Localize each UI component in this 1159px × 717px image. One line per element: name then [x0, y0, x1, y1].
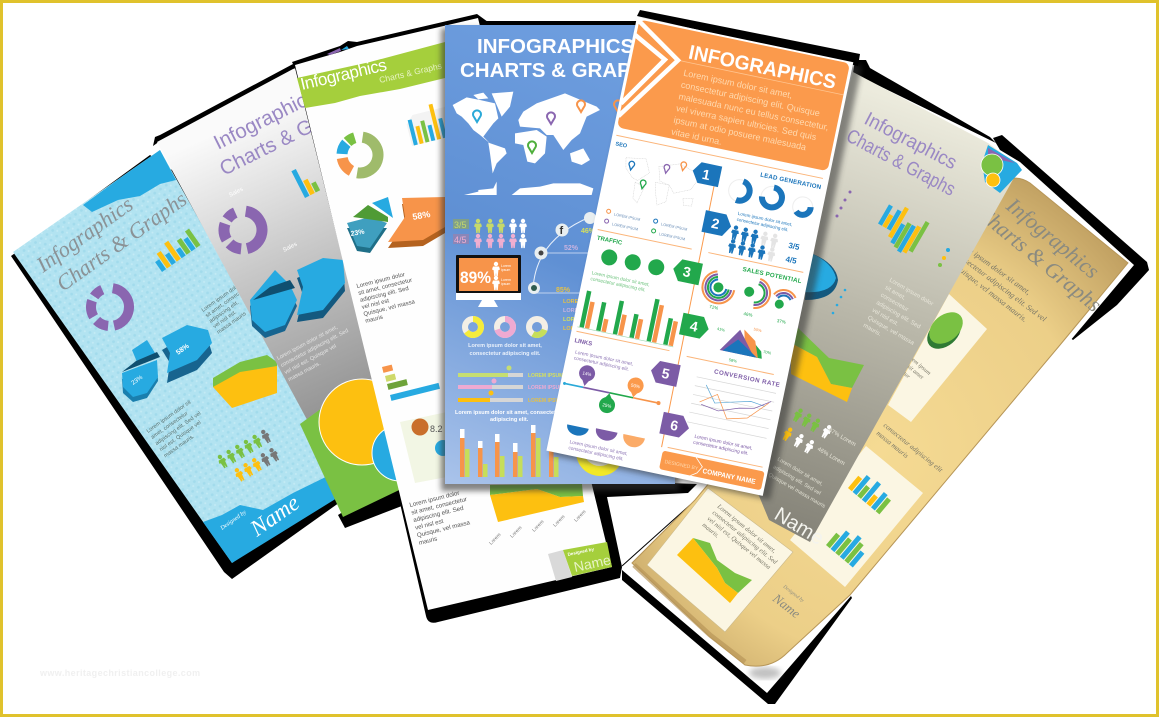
- footer text: [219, 490, 304, 542]
- 3D pie chart: 58%: [175, 342, 191, 357]
- middle text: massa mauris: [875, 429, 910, 460]
- poster 2: grey gradient: [157, 50, 420, 490]
- note text: Lorem ipsum dolor sit amet,: [715, 502, 777, 555]
- title: Infographics: [31, 191, 137, 278]
- lower text block: sit amet, consectetur: [411, 496, 468, 517]
- ratio labels: 3/5: [454, 220, 467, 230]
- people pictogram: [215, 428, 283, 487]
- text block: vel nisl est.: [871, 308, 900, 328]
- timeline pins: 14%: [582, 370, 592, 377]
- footer tab: Designed by: [567, 546, 595, 557]
- top note text: adipiscing: [877, 361, 900, 381]
- legend dots lower: [938, 248, 950, 267]
- traffic heading: TRAFFIC: [596, 236, 623, 247]
- text block upper: massa mauris: [216, 311, 248, 336]
- poster 6: beige-grey gradient: [740, 72, 1022, 550]
- badge 1: 1: [701, 166, 712, 183]
- links caption: consectetur adipiscing elit.: [573, 355, 630, 373]
- lower text block: [409, 488, 475, 547]
- middle text: consectetur adipiscing elit: [882, 421, 945, 475]
- 3D pie chart: [122, 325, 212, 402]
- area chart: [213, 355, 277, 408]
- map legend: LOREM IPSUM: [612, 222, 639, 232]
- poster 4: blue: [445, 25, 675, 484]
- text block upper: vel nisl est.: [212, 309, 238, 330]
- radial arc chart: [699, 265, 805, 324]
- yellow circle: [319, 379, 405, 465]
- footer tab: Name: [572, 551, 612, 575]
- soft shadow of orange poster: [550, 20, 862, 500]
- sales labels: Sales: [228, 187, 244, 199]
- ratio labels: 4/5: [454, 235, 467, 245]
- top note text: consectetur: [886, 358, 911, 381]
- green pie: [921, 306, 969, 355]
- text block: mauris: [365, 315, 384, 325]
- conversion caption: consectetur adipiscing elit.: [693, 440, 749, 457]
- badge 2: 2: [710, 215, 721, 232]
- title: INFOGRAPHICS: [477, 35, 634, 58]
- legend lines: LOREM: [563, 299, 583, 305]
- 3D bar chart: [149, 227, 201, 272]
- traffic caption: Lorem ipsum dolor sit amet,: [591, 270, 650, 288]
- area chart axis labels: Lorem: [509, 525, 523, 539]
- caption: [468, 343, 542, 357]
- timeline pins: 50%: [631, 383, 640, 389]
- badge 5: [649, 360, 681, 387]
- traffic panel: [577, 229, 694, 347]
- intro text: ipsum at odio posuere malesuada: [673, 115, 807, 152]
- links footer caption: [568, 439, 628, 463]
- title: Charts & Graphs: [216, 92, 363, 180]
- small bar chart: [291, 164, 320, 198]
- arc with icons: [528, 212, 600, 294]
- links timeline: [563, 381, 661, 405]
- text block: Quisque, vel massa: [866, 315, 915, 347]
- lower text block: adipiscing elit. Sed: [413, 505, 465, 524]
- intro text: Lorem ipsum dolor sit amet,: [683, 68, 793, 100]
- badge 6: 6: [669, 417, 680, 434]
- people labels: [816, 428, 857, 467]
- designer name: Name: [770, 503, 827, 550]
- text block: massa mauris.: [163, 434, 196, 459]
- footer text: Lorem dolor sit amet,: [776, 457, 824, 488]
- title: [843, 108, 961, 201]
- lead ratios: [785, 241, 801, 266]
- world map: [453, 92, 600, 195]
- text block: [356, 271, 420, 325]
- links footer caption: consectetur adipiscing elit.: [568, 445, 624, 463]
- footer text: Name: [245, 490, 304, 542]
- donut row: [465, 317, 547, 337]
- 3D pie chart: [250, 258, 345, 338]
- badge 4: 4: [689, 318, 700, 335]
- timeline pins: 25%: [602, 402, 612, 409]
- top note text: [877, 342, 932, 395]
- shadow under green footer: [338, 470, 425, 528]
- traffic caption: [590, 270, 650, 294]
- title: Infographics: [210, 84, 320, 154]
- 3D bar chart: [871, 199, 931, 258]
- map legend: LOREM IPSUM: [659, 232, 686, 241]
- progress bars: LOREM IPSUM: [528, 398, 563, 404]
- text block: Lorem ipsum dolor: [356, 272, 406, 290]
- badge 4: [679, 313, 711, 340]
- map legend: LOREM IPSUM: [614, 213, 641, 222]
- links caption: [573, 349, 634, 373]
- conversion heading: CONVERSION RATE: [713, 368, 780, 389]
- darker worn edge: [634, 565, 745, 662]
- footer text: [767, 457, 835, 510]
- footer banner: DESIGNED BY: [664, 459, 699, 472]
- scatter panel: [400, 412, 451, 483]
- text block: [146, 399, 211, 459]
- blue circle: [372, 425, 428, 481]
- 3D bar chart: [403, 99, 459, 146]
- caption: Lorem ipsum dolor sit amet, consectetur: [455, 410, 562, 416]
- text block: Quisque, vel massa: [363, 299, 416, 318]
- text block: sit amet, consectetur: [358, 278, 413, 297]
- sales potential panel: [687, 253, 808, 374]
- legend lines: LOREM: [563, 317, 583, 323]
- text block: sit amet,: [884, 285, 907, 302]
- text block: amet, consectetur: [150, 411, 189, 441]
- text block upper: Lorem ipsum dolor: [201, 283, 242, 314]
- progress bars: LOREM IPSUM: [528, 385, 563, 391]
- text block: consectetur adipiscing elit. Sed vel: [954, 249, 1049, 324]
- bars lower note: [826, 524, 871, 567]
- SEO heading: SEO: [615, 141, 628, 150]
- parchment shadow bottom: [622, 570, 852, 704]
- layered mountain chart: [711, 319, 776, 370]
- caption: Lorem ipsum dolor sit amet,: [468, 343, 542, 349]
- sales percentages: [709, 304, 786, 325]
- caption: adipiscing elit.: [490, 417, 529, 423]
- SEO panel: [598, 135, 823, 267]
- conversion caption: [693, 434, 753, 458]
- title: Infographics: [1001, 192, 1104, 283]
- title: INFOGRAPHICS: [687, 42, 838, 94]
- footer text: Quisque vel massa mauris: [767, 472, 826, 510]
- line chart: [687, 377, 776, 438]
- bars upper note: [848, 470, 895, 514]
- conversion caption: Lorem ipsum dolor sit amet,: [694, 434, 753, 452]
- links heading: LINKS: [574, 338, 593, 348]
- 3D pie chart: 23%: [350, 229, 366, 238]
- lead generation heading: LEAD GENERATION: [760, 172, 822, 191]
- green dots: [712, 279, 786, 309]
- bar chart: [460, 425, 558, 477]
- parchment white gap: [1000, 150, 1134, 341]
- footer banner: [659, 447, 766, 490]
- people pictogram: [474, 219, 527, 248]
- designer name: Designed by: [781, 584, 805, 604]
- area chart axis labels: Lorem: [531, 519, 545, 533]
- traffic bar chart: [577, 284, 682, 347]
- area chart in note: [677, 538, 752, 603]
- text block: [862, 278, 937, 355]
- progress bars: LOREM IPSUM: [528, 373, 563, 379]
- badge 6: [659, 412, 691, 439]
- title: CHARTS & GRAPHS: [460, 59, 659, 82]
- layered mountain chart: 70%: [763, 349, 772, 356]
- badge 2: [701, 210, 733, 237]
- text block: adipiscing elit. Sed vel: [154, 411, 202, 447]
- arc percentages: [556, 228, 596, 294]
- caption: [455, 410, 562, 423]
- footer banner: COMPANY NAME: [702, 468, 756, 486]
- area chart axis labels: Lorem: [488, 532, 502, 546]
- lower text block: Quisque, vel massa: [416, 519, 471, 539]
- people labels: 87% Lorem: [827, 428, 857, 448]
- title: Charts & Graphs: [972, 200, 1107, 317]
- donut chart: [221, 208, 265, 252]
- intro text: malesuada nunc eu tellus consectetur,: [678, 91, 830, 132]
- page curl: [548, 550, 572, 581]
- text block: Quisque, vel massa mauris.: [954, 262, 1029, 324]
- badge 5: 5: [660, 365, 671, 382]
- intro text: consectetur adipiscing elit. Quisque: [680, 80, 821, 118]
- black shadow of aqua poster: [11, 155, 350, 579]
- blue pie: [803, 250, 838, 300]
- monitor: Lorem: [501, 278, 511, 282]
- black top edge of poster 6: [853, 60, 996, 143]
- monitor: ipsum: [501, 268, 510, 272]
- map pins: [473, 100, 622, 153]
- traffic caption: consectetur adipiscing elit.: [590, 276, 646, 293]
- badge 1: [691, 161, 722, 187]
- top note text: dolor sit amet: [895, 355, 924, 381]
- torn blue footer: [203, 470, 350, 563]
- donut chart: [335, 130, 385, 180]
- footer text: Designed by: [219, 509, 248, 532]
- watermark: www.heritagechristiancollege.com: [39, 668, 201, 678]
- people pictogram: [781, 407, 834, 455]
- text block: consectetur: [879, 293, 909, 313]
- sales percentages: 37%: [776, 318, 786, 325]
- designer name: Name: [769, 590, 803, 621]
- scatter panel: 8.2: [430, 424, 443, 434]
- sales percentages: 71%: [709, 304, 719, 311]
- text block: mauris.: [862, 323, 882, 338]
- soft shadow of blue poster: [441, 28, 679, 491]
- paper note top: [888, 294, 987, 422]
- timeline pins: [572, 364, 645, 419]
- map legend: LOREM IPSUM: [661, 222, 688, 232]
- black line to parchment: [622, 505, 690, 566]
- links panel: [550, 331, 671, 468]
- legend lines: LOREM: [563, 326, 583, 332]
- note text: [700, 502, 784, 579]
- text block: Lorem ipsum dolor sit amet,: [953, 236, 1032, 297]
- sales percentages: 46%: [743, 311, 753, 318]
- sales labels: Sales: [282, 242, 298, 254]
- grey poster scrap showing behind: [327, 46, 349, 55]
- parchment soft shadow: [749, 667, 781, 679]
- corner badge: [981, 145, 1022, 193]
- note text: mauris.: [701, 522, 721, 540]
- yellow semi donut: [576, 428, 624, 476]
- lead people: [727, 225, 780, 262]
- orange header: [616, 19, 850, 171]
- top note text: Lorem ipsum: [903, 351, 932, 377]
- area chart axis labels: Lorem: [552, 514, 566, 528]
- conversion rate panel: [669, 356, 782, 460]
- timeline spine: [660, 186, 716, 447]
- text block upper: adipiscing elit.: [208, 300, 241, 325]
- lead donuts: [726, 177, 815, 219]
- subtitle: Charts & Graphs: [378, 61, 443, 85]
- layered mountain chart: 41%: [716, 326, 726, 333]
- poster 3: white with lime header: [295, 18, 612, 610]
- area chart: [791, 327, 864, 402]
- text block: vel nisl est: [361, 298, 390, 311]
- links footer caption: Lorem ipsum dolor sit amet,: [569, 439, 628, 457]
- lower area chart: [490, 484, 584, 522]
- intro text: vitae id urna.: [670, 127, 723, 147]
- badge 3: [671, 258, 703, 285]
- text block: consectetur adipiscing elit. Sed: [280, 328, 350, 369]
- intro text: [670, 68, 834, 168]
- text block: nisl est. Quisque vel: [159, 420, 202, 453]
- black shadow of white poster: [292, 14, 697, 623]
- arc percentages: 52%: [564, 245, 579, 252]
- arc percentages: 85%: [556, 287, 571, 294]
- world map outline: [617, 153, 702, 215]
- legend lines: LOREM: [563, 308, 583, 314]
- paper note bottom: [647, 488, 793, 632]
- map pins: [625, 151, 687, 197]
- text block upper: [201, 283, 257, 336]
- legend dots: [836, 190, 852, 218]
- text block: adipiscing elit. Sed: [875, 300, 921, 330]
- poster 7: parchment: [632, 178, 1128, 666]
- intro text: vel viverra sapien ultricies. Sed quis: [675, 103, 818, 142]
- lower text block: Lorem ipsum dolor: [409, 490, 460, 509]
- arc with icons: f: [560, 225, 564, 237]
- title: Charts & Graphs: [51, 186, 191, 296]
- text block: Lorem ipsum dolor sit: [146, 399, 193, 435]
- caption: consectetur adipiscing elit.: [470, 351, 541, 357]
- title: [460, 35, 659, 82]
- badge 3: 3: [682, 263, 693, 280]
- poster 5: orange and white: [546, 17, 853, 496]
- sales heading: SALES POTENTIAL: [742, 266, 802, 285]
- green footer with circles: [300, 379, 428, 517]
- layered mountain chart: 50%: [753, 327, 762, 333]
- layered mountain chart: 58%: [728, 357, 738, 364]
- 3D pie chart: [347, 197, 445, 253]
- legend lines: [563, 299, 583, 332]
- monitor: 89%: [460, 268, 491, 287]
- black top edge of orange poster: [637, 10, 860, 66]
- map legend: [612, 213, 688, 241]
- sales labels: [228, 187, 298, 254]
- legend pins: [604, 209, 658, 233]
- note text: consectetur adipiscing elit. Sed: [711, 509, 779, 566]
- footer tab: [563, 542, 612, 576]
- title: Infographics: [299, 55, 389, 94]
- 3D pie chart: 58%: [412, 209, 431, 222]
- ratio labels: [453, 219, 469, 245]
- footer text: adipiscing elit. Sed vel: [772, 464, 822, 497]
- lead caption: consectetur adipiscing elit.: [736, 217, 789, 232]
- lower text block: vel nisl est: [414, 518, 444, 532]
- text block: [276, 321, 357, 383]
- area chart axis labels: [488, 509, 587, 546]
- area chart axis labels: Lorem: [573, 509, 587, 523]
- poster 1: aqua textured: [13, 150, 350, 563]
- title: Infographics: [861, 108, 961, 174]
- lower text block: mauris: [418, 535, 438, 547]
- top black edge of blue poster: [486, 21, 646, 26]
- lead ratios: 3/5: [788, 241, 801, 252]
- 3D pie chart: 23%: [131, 374, 145, 387]
- arc percentages: 46%: [581, 228, 596, 235]
- title: Charts & Graphs: [843, 125, 959, 201]
- links caption: Lorem ipsum dolor sit amet,: [574, 349, 634, 367]
- monitor: Lorem: [501, 264, 511, 268]
- torn blue header: [83, 150, 176, 212]
- pie legend: [832, 289, 846, 314]
- lead ratios: 4/5: [785, 255, 798, 266]
- paper note middle: [790, 446, 923, 587]
- note text: vel nisl est, Quisque vel massa: [706, 516, 772, 571]
- text block: vel nisl est. Quisque vel: [284, 343, 337, 376]
- text block: adipiscing elit. Sed: [360, 286, 410, 304]
- monitor: ipsum: [501, 282, 510, 286]
- progress bars: [458, 366, 563, 404]
- text block: Lorem ipsum dolor sit amet,: [276, 324, 339, 362]
- monitor: [456, 255, 521, 307]
- traffic blobs: [600, 248, 666, 277]
- people labels: 46% Lorem: [816, 447, 846, 467]
- text block: Lorem ipsum dolor: [888, 278, 934, 308]
- donut chart: [88, 285, 132, 329]
- torn lime header: [297, 40, 480, 108]
- lead caption: Lorem ipsum dolor sit amet,: [737, 211, 793, 227]
- black top edge of grey poster: [153, 64, 297, 146]
- parchment shadow top right: [993, 135, 1149, 340]
- mini bars: [382, 365, 440, 401]
- text block: massa mauris.: [287, 361, 322, 383]
- bowls: [565, 422, 645, 449]
- text block upper: sit amet, consect: [205, 290, 242, 319]
